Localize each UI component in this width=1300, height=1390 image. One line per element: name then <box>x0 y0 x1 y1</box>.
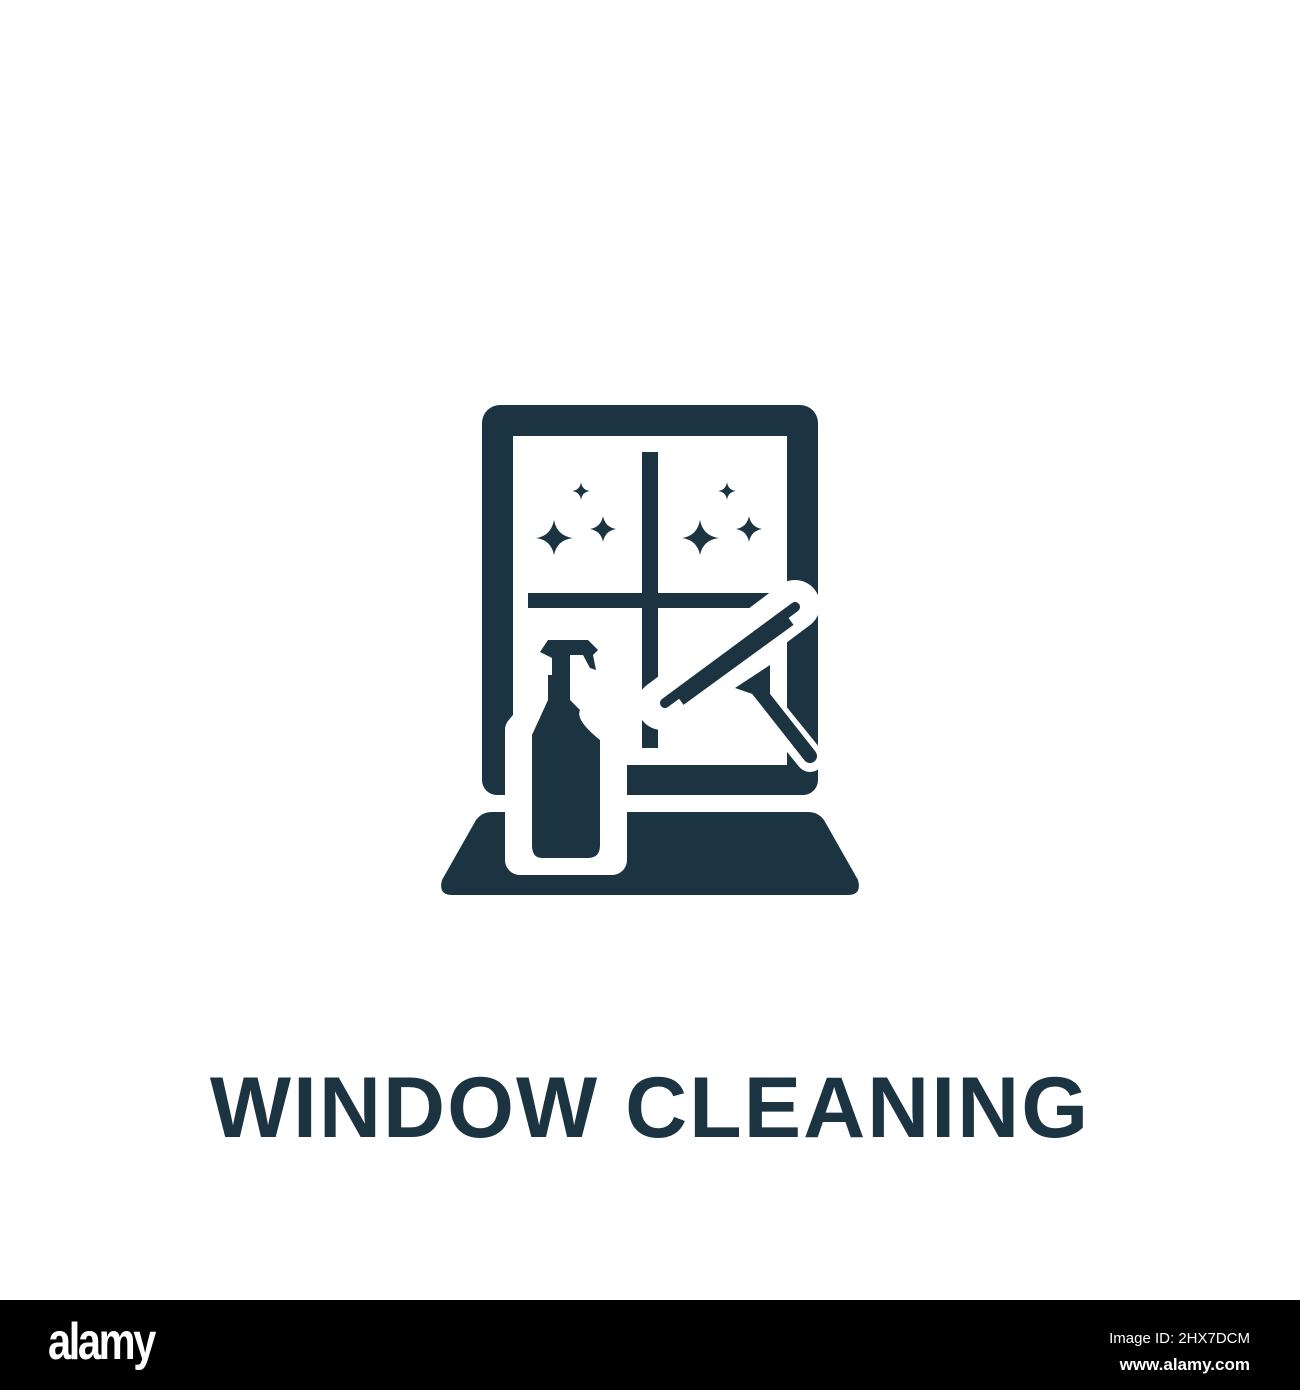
image id <box>1109 1330 1250 1374</box>
cross bars <box>642 452 658 748</box>
title: WINDOW CLEANING <box>210 1060 1090 1156</box>
logo: alamy <box>48 1313 154 1371</box>
sparkles <box>536 520 573 555</box>
image id: www.alamy.com <box>1120 1355 1250 1374</box>
squeegee <box>662 605 810 758</box>
image id: Image ID: 2HX7DCM <box>1109 1330 1250 1347</box>
sill <box>441 812 859 895</box>
footer bar <box>0 1300 1300 1390</box>
spray bottle <box>520 640 612 860</box>
window frame <box>482 405 818 795</box>
